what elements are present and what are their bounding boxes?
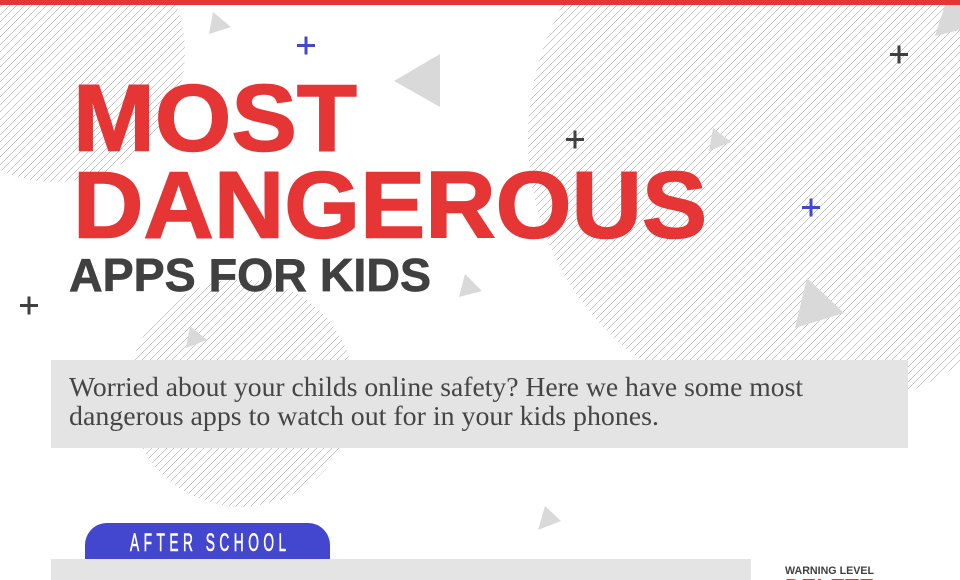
tab: after school [85,523,330,559]
decorative plus signs [20,36,908,314]
panel: app card top [51,559,751,580]
hatched circle: right [528,0,960,413]
title: APPS FOR KIDS [69,249,431,301]
panel: intro text [51,360,908,448]
hatched circle: top left [0,0,185,182]
warning level label: WARNING LEVEL [785,565,874,577]
title: DANGEROUS [73,152,707,258]
title [69,66,707,301]
top red bar [0,0,960,5]
title: MOST [73,66,357,172]
decorative triangles [186,5,960,530]
hatched circle: centre left [128,280,355,506]
panel: intro text: Worried about your childs online safety? Here we have some most [69,372,804,402]
tab: after school: AFTER SCHOOL [130,530,286,557]
panel: intro text: dangerous apps to watch out for in your kids phones. [69,401,659,431]
